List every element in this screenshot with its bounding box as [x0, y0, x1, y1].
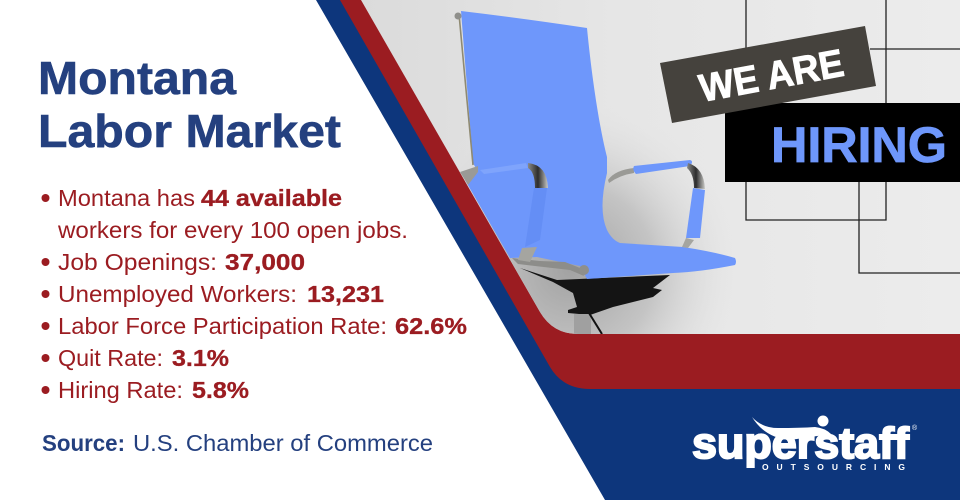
icon: office chair [454, 11, 736, 334]
bullet: available workers [42, 185, 408, 243]
blue diagonal band and footer [316, 0, 960, 500]
source line: Source: [42, 430, 125, 456]
bullet: unemployed workers: Unemployed Workers: [58, 281, 297, 307]
bullet: hiring rate [42, 377, 249, 403]
bullet: available workers: 44 available [201, 185, 342, 211]
source line: U.S. Chamber of Commerce [133, 430, 433, 456]
bullet: job openings: 37,000 [225, 249, 305, 275]
chair base [520, 268, 670, 334]
wall backdrop [340, 0, 960, 334]
bullet: available workers: workers for every 100 open jobs. [57, 217, 408, 243]
bullet: participation rate: Labor Force Participation Rate: [58, 313, 387, 339]
logo: superstaff outsourcing [692, 416, 918, 472]
chair back frame [459, 14, 473, 165]
bullet: participation rate: 62.6% [395, 313, 467, 339]
statistics list [42, 185, 467, 403]
banner text: HIRING [771, 116, 947, 173]
logo registered mark: ® [912, 424, 918, 432]
bullet: hiring rate: Hiring Rate: [58, 377, 183, 403]
we are banner [660, 26, 876, 123]
bullet: job openings [42, 249, 305, 275]
photo panel: office chair and hiring sign [340, 0, 960, 334]
bullet: quit rate: Quit Rate: [58, 345, 163, 371]
chair headrest bolt [454, 12, 462, 20]
red diagonal band [340, 0, 960, 389]
decorative wire frames [746, 0, 960, 273]
title: Labor Market [38, 105, 341, 157]
chair seat bolt [579, 265, 589, 275]
left armrest [460, 163, 548, 262]
banner text: WE ARE [696, 42, 847, 111]
title [38, 52, 341, 157]
logo dot [818, 416, 828, 426]
bullet: quit rate [42, 345, 229, 371]
bullet: quit rate: 3.1% [172, 345, 229, 371]
hiring banner [725, 103, 960, 182]
wall shadow [457, 146, 700, 334]
bullet: hiring rate: 5.8% [192, 377, 249, 403]
right armrest [608, 160, 705, 248]
bullet: job openings: Job Openings: [58, 249, 217, 275]
chair seat rail [512, 258, 584, 276]
logo wordmark: superstaff [692, 419, 909, 468]
chair back and seat [461, 11, 736, 279]
bullet: available workers: Montana has [58, 185, 195, 211]
logo swoosh [752, 417, 831, 440]
title: Montana [38, 52, 236, 104]
bullet: unemployed workers [42, 281, 384, 307]
bullet: unemployed workers: 13,231 [307, 281, 384, 307]
logo tagline: OUTSOURCING [762, 462, 905, 472]
